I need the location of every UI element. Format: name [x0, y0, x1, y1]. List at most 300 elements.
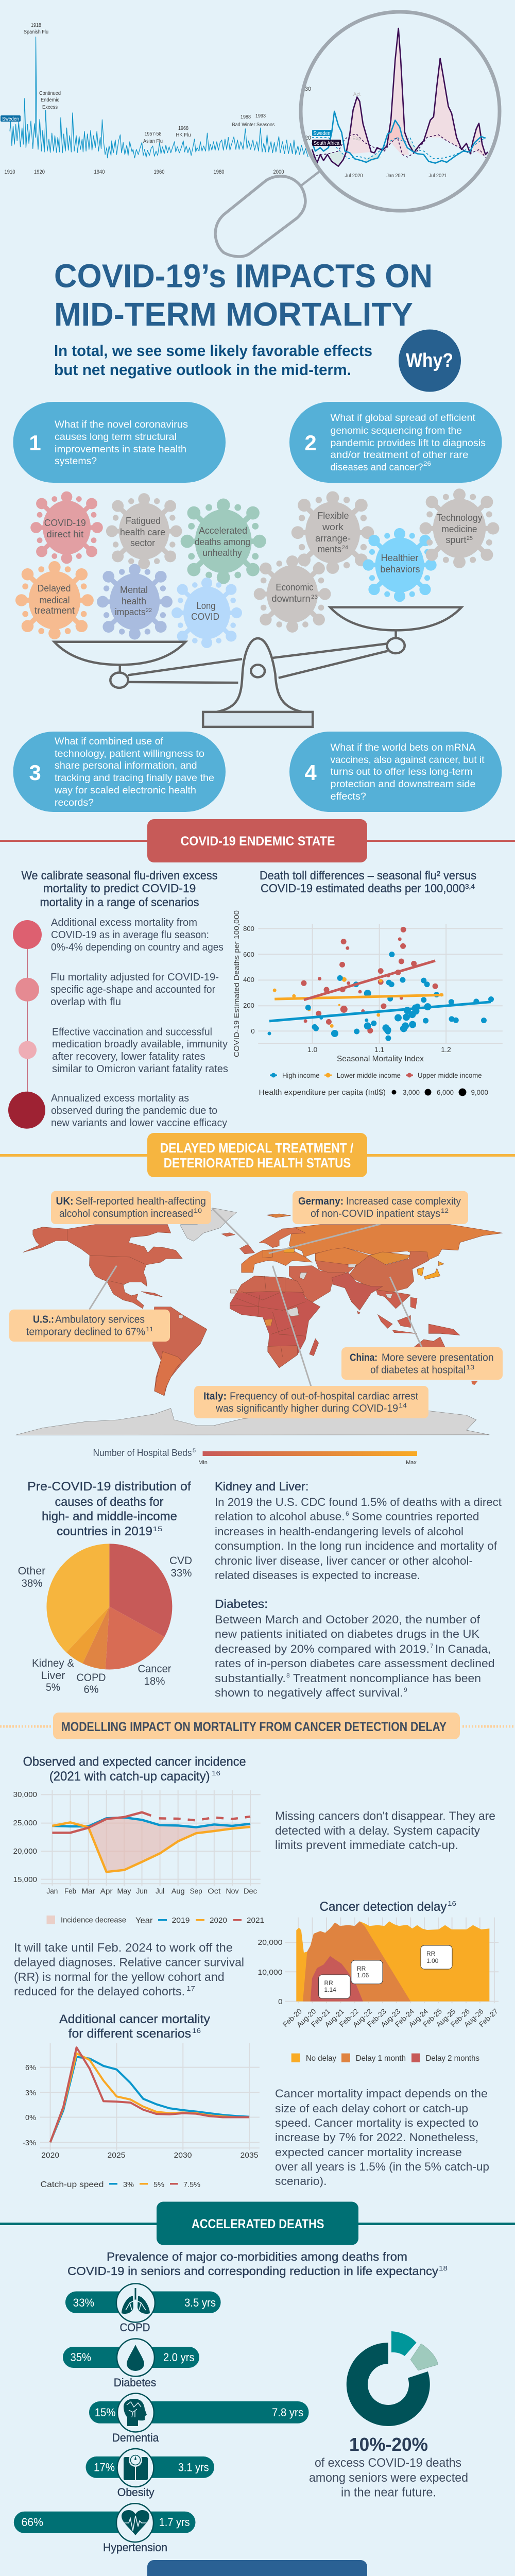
- text: scenario 2: specific age-shape and accounted for: [50, 984, 215, 995]
- chart: additional cancer mortality lines: 6%: [25, 2063, 36, 2072]
- text: scenario 3: after recovery, lower fatality rates: [52, 1051, 205, 1062]
- legend: number of hospital beds: [93, 1448, 417, 1466]
- callout: Italy: was significantly higher during COVID-19: [215, 1403, 398, 1414]
- chart: pie of causes of death: Kidney &: [32, 1657, 74, 1669]
- icon: virus, mental health impacts: impacts: [115, 607, 145, 617]
- panel: question 4: effects?: [331, 791, 366, 802]
- callout: China: More severe presentation: [382, 1352, 493, 1364]
- heading: additional cancer mortality: [59, 2012, 210, 2041]
- legend: number of hospital beds: Min: [198, 1460, 208, 1466]
- panel: question 4: 4: [304, 760, 317, 785]
- chart: additional cancer mortality lines: 2030: [174, 2151, 192, 2160]
- legend: catch-up speed: 7.5%: [183, 2180, 200, 2189]
- chart: cancer incidence line chart: Jul: [156, 1887, 164, 1896]
- icon: virus, healthier behaviors: Healthier: [381, 553, 418, 563]
- legend: health expenditure: Health expenditure per capita (Intl$): [259, 1088, 386, 1097]
- icon: virus, technology medicine spurt: spurt: [445, 535, 467, 545]
- chart: magnified excess mortality Sweden vs South Africa: [305, 28, 488, 179]
- callout: U.S.: U.S.:: [33, 1314, 54, 1326]
- chart: long-term excess mortality history, Sweden: HK Flu: [176, 132, 191, 138]
- chart: long-term excess mortality history, Sweden: 1918: [31, 23, 41, 28]
- heading: calibration of seasonal flu: We calibrate seasonal flu-driven excess: [22, 869, 217, 882]
- legend: catch-up speed: 5%: [153, 2180, 164, 2189]
- label: RR 1.00: RR: [426, 1950, 436, 1957]
- text: cancer mortality impact: increase by 7% for 2022. Nonetheless,: [275, 2131, 478, 2144]
- chart: magnified excess mortality Sweden vs South Africa: Exp: [352, 136, 362, 142]
- callout: UK: UK:: [56, 1196, 73, 1207]
- panel: question 4: What if the world bets on mRNA: [331, 742, 476, 753]
- legend: incidence chart: [46, 1916, 264, 1925]
- text: 10%-20% callout: [309, 2434, 468, 2500]
- callout: UK: [51, 1191, 211, 1224]
- icon: virus, long COVID: Long: [197, 601, 215, 611]
- chart: cancer detection delay area chart: Aug-26: [462, 2007, 485, 2029]
- subtitle: In total, we see some likely favorable effects: [54, 342, 372, 360]
- label: RR 1.00: 1.00: [426, 1957, 439, 1964]
- text: delayed diagnoses: It will take until Feb. 2024 to work off the: [14, 1941, 233, 1954]
- chart: cancer incidence line chart: May: [117, 1887, 131, 1896]
- chart: scatter plot seasonal mortality index vs COVID-19 deaths: 200: [243, 1002, 254, 1009]
- text: scenario 1: [51, 917, 224, 953]
- diagram: weighing viruses, positive factors: [254, 488, 499, 633]
- chart: cancer detection delay area chart: 10,000: [258, 1968, 282, 1977]
- heading: modelling impact on mortality: MODELLING IMPACT ON MORTALITY FROM CANCER DETECTION DELAY: [61, 1720, 447, 1734]
- chart: scatter plot seasonal mortality index vs COVID-19 deaths: 1.0: [307, 1045, 317, 1054]
- chart: cancer incidence line chart: Oct: [208, 1887, 221, 1896]
- label: RR 1.14: 1.14: [324, 1986, 336, 1993]
- bar: diabetes: Diabetes: [114, 2376, 156, 2389]
- heading: additional cancer mortality: Additional cancer mortality: [59, 2012, 210, 2026]
- chart: cancer detection delay area chart: Aug-20: [295, 2007, 318, 2029]
- bar: hypertension: 66%: [22, 2516, 43, 2529]
- text: diabetes: In Canada,: [435, 1642, 491, 1655]
- chart: cancer incidence line chart: 20,000: [13, 1847, 37, 1856]
- heading: calibration of seasonal flu: mortality to predict COVID-19: [43, 882, 196, 895]
- legend: health expenditure: 6,000: [437, 1088, 454, 1096]
- text: kidney and liver: Kidney and Liver:: [215, 1480, 309, 1493]
- panel: scenario timeline: [8, 917, 228, 1129]
- chart: cancer detection delay area chart: Aug-23: [379, 2007, 402, 2029]
- icon: virus, delayed medical treatment: medical: [39, 595, 70, 605]
- text: scenario 4: [51, 1093, 227, 1129]
- text: kidney and liver: 6: [346, 1510, 349, 1517]
- chart: scatter plot seasonal mortality index vs COVID-19 deaths: 1.2: [441, 1045, 451, 1054]
- label: RR 1.14: [319, 1975, 350, 1998]
- heading: observed and expected cancer incidence: 16: [212, 1769, 220, 1777]
- chart: cancer incidence line chart: 25,000: [13, 1819, 37, 1827]
- text: delayed diagnoses: 17: [186, 1985, 195, 1992]
- heading: prevalence of co-morbidities: 18: [439, 2264, 448, 2272]
- text: missing cancers: [275, 1809, 495, 1852]
- callout: Germany: of non-COVID inpatient stays: [311, 1208, 440, 1219]
- icon: virus, economic downturn: [254, 555, 331, 633]
- icon: virus, accelerated deaths: [181, 499, 266, 584]
- chart: cancer incidence line chart: Mar: [82, 1887, 95, 1896]
- heading: death toll differences: Death toll differences – seasonal flu² versus: [260, 869, 476, 882]
- text: diabetes: 9: [404, 1686, 407, 1693]
- callout: Italy: Italy:: [203, 1391, 227, 1402]
- legend: health expenditure: 9,000: [471, 1088, 488, 1096]
- chart: cancer incidence line chart: Apr: [100, 1887, 113, 1896]
- chart: pie of causes of death: Liver: [41, 1670, 65, 1682]
- chart: additional cancer mortality lines: 2020: [41, 2151, 59, 2160]
- chart: pie of causes of death: Cancer: [138, 1663, 171, 1675]
- chart: cancer detection delay area chart: 20,000: [258, 1938, 282, 1947]
- icon: virus, technology medicine spurt: [420, 488, 499, 568]
- legend: health expenditure: 3,000: [403, 1088, 420, 1096]
- bar: COPD: [65, 2283, 221, 2334]
- bar: hypertension: Hypertension: [103, 2541, 167, 2554]
- icon: weighing scale: [124, 2453, 148, 2480]
- text: kidney and liver: related diseases is expected to increase.: [215, 1569, 420, 1582]
- bar: dementia: [89, 2394, 309, 2444]
- bar: diabetes: [63, 2339, 199, 2389]
- panel: question 2: 26: [423, 461, 431, 467]
- chart: cancer incidence line chart: Nov: [226, 1887, 239, 1896]
- legend: incidence chart: 2019: [172, 1916, 190, 1925]
- text: diabetes: shown to negatively affect survival.: [215, 1686, 403, 1699]
- chart: long-term excess mortality history, Sweden: 1993: [255, 113, 266, 119]
- callout: U.S.: [9, 1310, 170, 1342]
- icon: virus, technology medicine spurt: medicine: [442, 524, 477, 534]
- bar: COPD: 33%: [73, 2296, 94, 2309]
- panel: question 4: protection and downstream side: [331, 778, 476, 790]
- label: RR 1.06: RR: [357, 1965, 366, 1972]
- chart: cancer detection delay area chart: Feb-23: [366, 2007, 388, 2028]
- chart: cancer detection delay area chart: Aug-25: [435, 2007, 457, 2029]
- icon: virus, accelerated deaths: unhealthy: [202, 548, 242, 558]
- icon: scenario 4 marker: [8, 1092, 45, 1129]
- icon: virus, long COVID: COVID: [191, 612, 219, 622]
- icon: virus, mental health impacts: 22: [146, 607, 152, 614]
- icon: virus, mental health impacts: health: [122, 596, 146, 606]
- panel: question 4: [289, 732, 502, 812]
- chart: long-term excess mortality history, Sweden: [1, 23, 308, 175]
- heading: pre-COVID-19 causes of death: 15: [152, 1525, 163, 1533]
- chart: long-term excess mortality history, Sweden: 1940: [94, 169, 105, 175]
- legend: income groups: Lower middle income: [337, 1071, 401, 1079]
- heading: death toll differences: [260, 869, 476, 895]
- legend: health expenditure: [259, 1088, 488, 1097]
- chart: cancer detection delay area chart: Aug-24: [407, 2007, 430, 2029]
- icon: virus, economic downturn: Economic: [276, 582, 313, 592]
- bar: hypertension: 1.7 yrs: [159, 2516, 190, 2529]
- callout: Germany: Increased case complexity: [346, 1196, 461, 1207]
- chart: cancer incidence line chart: [13, 1790, 264, 1925]
- text: delayed diagnoses: delayed diagnoses. Relative cancer survival: [14, 1956, 244, 1969]
- icon: heart with pulse: [122, 2510, 149, 2535]
- text: diabetes: substantially.: [215, 1672, 286, 1685]
- text: diabetes: decreased by 20% compared with 2019.: [215, 1642, 430, 1655]
- callout: Italy: 14: [399, 1402, 407, 1409]
- bar: obesity: 3.1 yrs: [178, 2461, 209, 2474]
- icon: head with brain: [124, 2399, 147, 2426]
- chart: pie of causes of death: 6%: [83, 1684, 99, 1696]
- chart: pie of causes of death: 33%: [171, 1567, 192, 1579]
- icon: virus, healthier behaviors: behaviors: [380, 564, 420, 574]
- callout: China: 13: [466, 1364, 474, 1371]
- callout: China: of diabetes at hospital: [370, 1365, 466, 1376]
- chart: magnified excess mortality Sweden vs South Africa: Sweden: [313, 131, 331, 137]
- icon: virus, mental health impacts: [97, 564, 173, 639]
- chart: cancer incidence line chart: Aug: [171, 1887, 185, 1896]
- text: cancer mortality impact: expected cancer mortality increase: [275, 2146, 462, 2159]
- text: diabetes: Treatment noncompliance has been: [293, 1672, 481, 1685]
- text: cancer mortality impact: Cancer mortality impact depends on the: [275, 2087, 488, 2100]
- heading: pre-COVID-19 causes of death: high- and middle-income: [42, 1510, 177, 1523]
- chart: cancer incidence line chart: Sep: [190, 1887, 202, 1896]
- heading: additional cancer mortality: 16: [192, 2027, 201, 2035]
- heading: delayed medical treatment: [0, 1133, 515, 1177]
- heading: outlook for insured lives: [0, 2560, 515, 2576]
- chart: scatter plot seasonal mortality index vs COVID-19 deaths: 800: [243, 925, 254, 933]
- chart: cancer detection delay area chart: Feb-27: [477, 2007, 500, 2028]
- icon: virus, flexible work arrangements: 24: [342, 545, 348, 551]
- chart: scatter plot seasonal mortality index vs COVID-19 deaths: 1.1: [374, 1045, 385, 1054]
- icon: virus, flexible work arrangements: Flexible: [317, 511, 349, 521]
- icon: virus, healthier behaviors: [363, 528, 437, 602]
- panel: question 1: What if the novel coronavirus: [55, 419, 188, 430]
- legend: catch-up speed: 3%: [123, 2180, 134, 2189]
- callout: U.S.: temporary declined to 67%: [26, 1327, 145, 1338]
- chart: magnified excess mortality Sweden vs South Africa: Jan 2021: [386, 173, 406, 179]
- text: kidney and liver: relation to alcohol abuse.: [215, 1510, 345, 1523]
- callout: UK: 10: [194, 1207, 202, 1214]
- icon: virus, economic downturn: 23: [311, 594, 318, 600]
- panel: question 3: technology, patient willingness to: [55, 748, 204, 759]
- chart: magnified excess mortality Sweden vs South Africa: South Africa: [314, 141, 339, 146]
- icon: balance scale: [54, 607, 461, 727]
- chart: long-term excess mortality history, Sweden: Endemic: [41, 97, 59, 103]
- text: diabetes: new patients initiated on diabetes drugs in the UK: [215, 1628, 479, 1640]
- panel: question 4: vaccines, also against cancer, but it: [331, 754, 485, 766]
- chart: long-term excess mortality history, Sweden: 1988: [241, 114, 251, 120]
- legend: incidence chart: Incidence decrease: [61, 1916, 126, 1925]
- chart: magnified excess mortality Sweden vs South Africa: 30: [305, 86, 311, 92]
- text: 10%-20% callout: of excess COVID-19 deaths: [315, 2456, 461, 2470]
- callout: Germany: [293, 1191, 468, 1224]
- heading: observed and expected cancer incidence: [23, 1755, 246, 1784]
- text: scenario 2: overlap with flu: [50, 996, 121, 1008]
- label: RR 1.06: [351, 1960, 383, 1984]
- text: diabetes: Between March and October 2020, the number of: [215, 1613, 480, 1626]
- chart: cancer detection delay area chart: Aug-21: [323, 2007, 346, 2029]
- chart: cancer detection delay area chart: Feb-25: [421, 2007, 443, 2028]
- icon: virus, technology medicine spurt: Technology: [437, 513, 482, 523]
- text: scenario 4: observed during the pandemic due to: [51, 1105, 217, 1116]
- text: scenario 3: medication broadly available, immunity: [52, 1039, 228, 1050]
- icon: virus, accelerated deaths: deaths among: [195, 537, 250, 547]
- callout: Germany: Germany:: [298, 1196, 344, 1207]
- callout: U.S.: Ambulatory services: [55, 1314, 145, 1326]
- icon: virus, COVID-19 direct hit: COVID-19: [44, 518, 86, 528]
- chart: long-term excess mortality history, Sweden: 1980: [213, 169, 225, 175]
- text: diabetes: [215, 1597, 494, 1699]
- text: kidney and liver: consumption. In the long run incidence and mortality of: [215, 1539, 497, 1552]
- chart: long-term excess mortality history, Sweden: 1960: [153, 169, 165, 175]
- text: kidney and liver: [215, 1480, 502, 1582]
- text: scenario 3: similar to Omicron variant fatality rates: [52, 1063, 228, 1075]
- chart: pie of causes of death: CVD: [169, 1555, 192, 1567]
- text: diabetes: 8: [286, 1672, 290, 1679]
- legend: delay cohorts: Delay 2 months: [425, 2054, 479, 2063]
- bar: diabetes: 35%: [70, 2351, 91, 2364]
- bar: obesity: 17%: [94, 2461, 115, 2474]
- icon: virus, COVID-19 direct hit: [30, 492, 103, 564]
- chart: cancer incidence line chart: Dec: [244, 1887, 257, 1896]
- text: scenario 1: COVID-19 as in average flu season:: [51, 929, 209, 941]
- icon: virus, mental health impacts: Mental: [120, 585, 148, 595]
- icon: scenario 3 marker: [19, 1041, 37, 1059]
- legend: income groups: [270, 1071, 482, 1079]
- heading: cancer detection delay: Cancer detection delay: [319, 1900, 447, 1914]
- title: MID-TERM MORTALITY: [54, 296, 413, 333]
- icon: virus, fatigued health care sector: health care: [120, 527, 165, 537]
- chart: pie of causes of death: 38%: [22, 1578, 42, 1589]
- icon: scenario 1 marker: [13, 920, 42, 949]
- text: missing cancers: limits prevent immediate catch-up.: [275, 1838, 458, 1852]
- chart: scatter plot seasonal mortality index vs COVID-19 deaths: 400: [243, 976, 254, 984]
- legend: income groups: Upper middle income: [418, 1071, 482, 1079]
- panel: question 2: [289, 402, 502, 483]
- chart: scatter plot seasonal mortality index vs COVID-19 deaths: [232, 910, 503, 1097]
- callout: UK: alcohol consumption increased: [59, 1208, 193, 1219]
- label: RR 1.14: RR: [324, 1979, 333, 1987]
- title: COVID-19’s IMPACTS ON: [54, 258, 433, 295]
- heading: COVID-19 endemic state: COVID-19 ENDEMIC STATE: [180, 834, 335, 849]
- panel: question 1: 1: [29, 431, 41, 455]
- callout: China: China:: [350, 1352, 377, 1364]
- chart: magnified excess mortality Sweden vs South Africa: Jul 2021: [428, 173, 447, 179]
- text: cancer mortality impact: scenario).: [275, 2175, 327, 2188]
- chart: cancer detection delay area chart: [258, 1918, 500, 2063]
- chart: additional cancer mortality lines: 2025: [107, 2151, 126, 2160]
- heading: delayed medical treatment: DETERIORATED HEALTH STATUS: [164, 1155, 351, 1171]
- panel: question 2: What if global spread of efficient: [331, 412, 476, 423]
- icon: lungs: [122, 2288, 150, 2314]
- panel: question 2: 2: [304, 431, 317, 455]
- chart: cancer detection delay area chart: Feb-26: [449, 2007, 471, 2028]
- bar: COPD: COPD: [119, 2321, 150, 2334]
- heading: death toll differences: COVID-19 estimated deaths per 100,000: [261, 882, 465, 895]
- icon: virus, COVID-19 direct hit: direct hit: [46, 529, 83, 539]
- text: delayed diagnoses: (RR) is normal for the yellow cohort and: [14, 1970, 225, 1984]
- heading: calibration of seasonal flu: mortality in a range of scenarios: [40, 895, 199, 909]
- panel: question 1: improvements in state health: [55, 444, 186, 455]
- panel: question 2: pandemic provides lift to diagnosis: [331, 437, 486, 449]
- panel: question 3: records?: [55, 797, 94, 808]
- chart: cancer detection delay area chart: Aug-22: [351, 2007, 374, 2029]
- chart: long-term excess mortality history, Sweden: Excess: [42, 105, 58, 110]
- chart: long-term excess mortality history, Sweden: 1968: [178, 126, 188, 131]
- heading: death toll differences: 3,4: [465, 883, 475, 890]
- panel: question 2: genomic sequencing from the: [331, 425, 462, 436]
- icon: virus, flexible work arrangements: ments: [318, 544, 341, 554]
- text: delayed diagnoses: reduced for the delayed cohorts.: [14, 1985, 185, 1998]
- panel: question 3: What if combined use of: [55, 736, 164, 747]
- icon: virus, long COVID: [171, 578, 242, 648]
- chart: cancer incidence line chart: Jun: [136, 1887, 147, 1896]
- heading: pre-COVID-19 causes of death: countries in 2019: [57, 1524, 152, 1538]
- text: cancer mortality impact: [275, 2087, 489, 2188]
- heading: observed and expected cancer incidence: Observed and expected cancer incidence: [23, 1755, 246, 1769]
- heading: observed and expected cancer incidence: (2021 with catch-up capacity): [49, 1769, 210, 1784]
- icon: virus, delayed medical treatment: Delayed: [37, 583, 71, 594]
- bar: dementia: 15%: [95, 2406, 115, 2419]
- text: kidney and liver: Some countries reported: [352, 1510, 479, 1523]
- chart: cancer detection delay area chart: Feb-20: [281, 2007, 303, 2028]
- chart: long-term excess mortality history, Sweden: Continued: [39, 91, 61, 96]
- chart: magnified excess mortality Sweden vs South Africa: Jul 2020: [345, 173, 363, 179]
- icon: virus, fatigued health care sector: Fatigued: [126, 516, 161, 526]
- chart: additional cancer mortality lines: 2035: [240, 2151, 259, 2160]
- legend: incidence chart: 2021: [247, 1916, 264, 1925]
- subtitle: [54, 342, 372, 379]
- text: cancer mortality impact: size of each delay cohort or catch-up: [275, 2102, 468, 2115]
- heading: accelerated deaths: ACCELERATED DEATHS: [192, 2217, 324, 2231]
- bar: dementia: 7.8 yrs: [272, 2406, 303, 2419]
- icon: virus, delayed medical treatment: [15, 561, 94, 639]
- callout: U.S.: 11: [146, 1326, 153, 1333]
- chart: long-term excess mortality history, Sweden: 2000: [273, 169, 284, 175]
- chart: cancer detection delay area chart: Feb-24: [393, 2007, 416, 2028]
- heading: pre-COVID-19 causes of death: causes of deaths for: [55, 1495, 164, 1509]
- chart: pie of causes of death: 18%: [144, 1675, 165, 1687]
- text: 10%-20% callout: among seniors were expected: [309, 2471, 468, 2485]
- text: missing cancers: Missing cancers don't disappear. They are: [275, 1809, 495, 1823]
- icon: virus, flexible work arrangements: work: [322, 522, 344, 532]
- panel: question 3: [13, 732, 226, 812]
- text: diabetes: Diabetes:: [215, 1597, 268, 1611]
- callout: Italy: Frequency of out-of-hospital cardiac arrest: [230, 1391, 418, 1402]
- chart: cancer incidence line chart: 30,000: [13, 1790, 37, 1799]
- text: cancer mortality impact: speed. Cancer mortality is expected to: [275, 2116, 478, 2129]
- chart: additional cancer mortality lines: -3%: [23, 2139, 36, 2147]
- chart: long-term excess mortality history, Sweden: 1910: [4, 169, 15, 175]
- chart: world map of hospital beds: [16, 1208, 503, 1435]
- callout: UK: Self-reported health-affecting: [75, 1196, 206, 1207]
- text: missing cancers: detected with a delay. System capacity: [275, 1824, 480, 1837]
- heading: calibration of seasonal flu: [22, 869, 217, 909]
- bar: obesity: [85, 2449, 214, 2499]
- chart: additional cancer mortality lines: 0%: [25, 2113, 36, 2122]
- chart: magnified excess mortality Sweden vs South Africa: Act: [353, 92, 360, 97]
- legend: catch-up speed: Catch-up speed: [40, 2180, 104, 2189]
- diagram: weighing viruses, negative factors: [15, 492, 266, 648]
- chart: scatter plot seasonal mortality index vs COVID-19 deaths: 600: [243, 951, 254, 958]
- legend: delay cohorts: [291, 2054, 479, 2063]
- text: scenario 3: [52, 1026, 228, 1075]
- legend: number of hospital beds: 5: [193, 1448, 196, 1454]
- chart: long-term excess mortality history, Sweden: Bad Winter Seasons: [232, 122, 275, 128]
- text: kidney and liver: increases in health-endangering levels of alcohol: [215, 1525, 464, 1538]
- heading: accelerated deaths: [0, 2202, 515, 2245]
- connectors: callout leader lines: [89, 1208, 422, 1386]
- text: scenario 4: Annualized excess mortality as: [51, 1093, 189, 1104]
- chart: pie of causes of death: COPD: [76, 1672, 106, 1684]
- text: scenario 3: Effective vaccination and successful: [52, 1026, 212, 1038]
- icon: virus, accelerated deaths: Accelerated: [199, 526, 247, 536]
- panel: question 3: share personal information, and: [55, 760, 197, 771]
- text: kidney and liver: In 2019 the U.S. CDC found 1.5% of deaths with a direct: [215, 1496, 502, 1509]
- chart: pie of causes of death: 5%: [46, 1682, 60, 1693]
- chart: additional cancer mortality lines: [23, 2043, 260, 2189]
- icon: virus, flexible work arrangements: arrange-: [315, 533, 351, 544]
- icon: virus, fatigued health care sector: [106, 493, 182, 569]
- chart: long-term excess mortality history, Sweden: Asian Flu: [143, 139, 163, 144]
- callout: Why?: [399, 330, 461, 392]
- chart: cancer detection delay area chart: Feb-22: [338, 2007, 360, 2028]
